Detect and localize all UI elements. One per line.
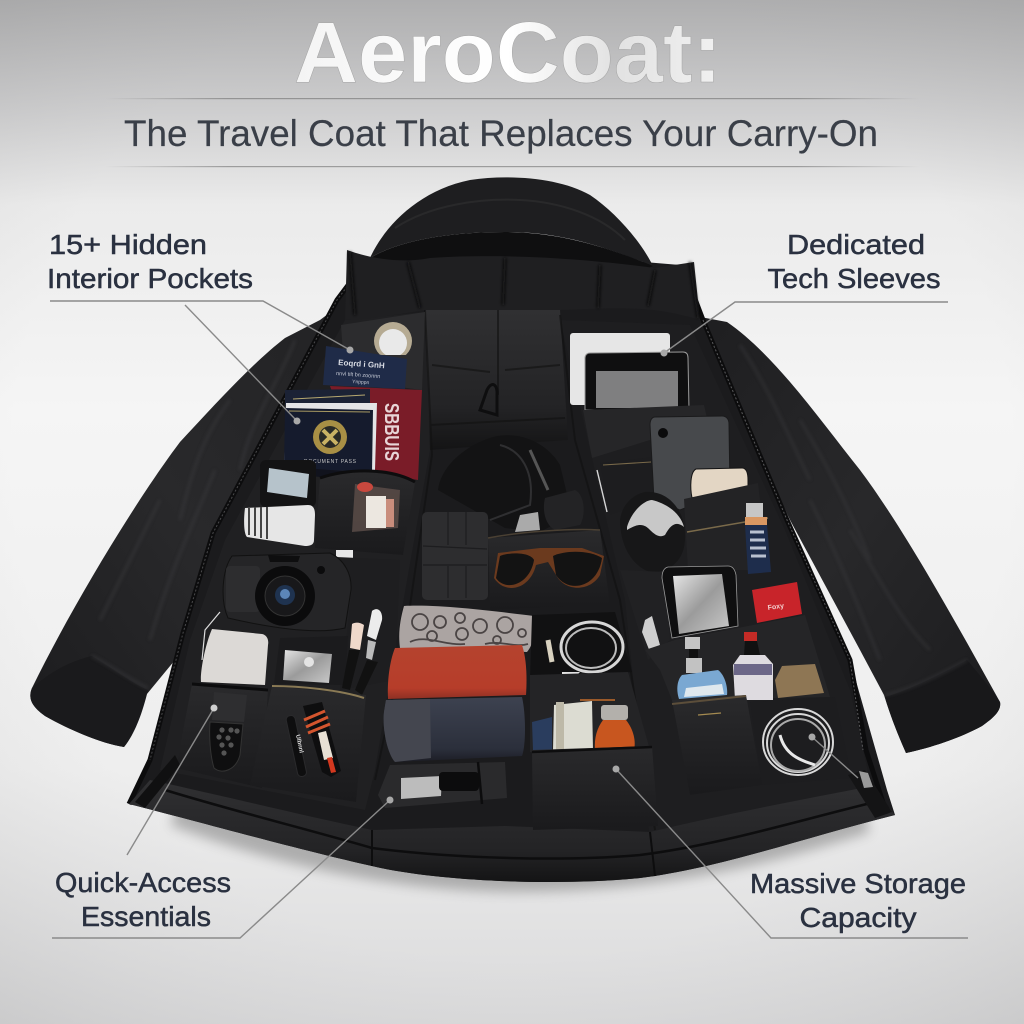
red box [752,582,802,623]
camera [223,553,351,631]
callout: Quick-Access Essentials: Quick-Access [55,867,231,898]
right zip pocket [684,483,768,570]
callout: Massive Storage Capacity [612,734,968,938]
tan package [775,664,824,698]
pouch with clear pocket [315,471,415,555]
coat body and lining [129,250,895,882]
maroon passport: SBBUIS [380,403,402,461]
navy card [323,346,407,389]
cable clip under pouch [336,550,353,558]
large storage pocket [532,746,658,830]
sunscreen tube [745,503,771,574]
navy passports [284,389,377,480]
white bottle [733,632,773,700]
grey phone [650,416,730,510]
left sleeve cuff [30,656,148,747]
red box: Foxy [767,603,785,612]
callout: 15+ Hidden Interior Pockets: 15+ Hidden [49,229,207,260]
navy card: Ynpppn [352,379,370,386]
right sleeve cuff [885,660,1000,753]
pocket with toiletries [530,672,650,752]
power bank [201,629,268,685]
pocket with USB tools [250,686,366,802]
upper right pocket [583,405,712,458]
white adapter [244,505,315,546]
red roll [388,645,527,699]
right sleeve [695,316,1000,753]
callout: Massive Storage Capacity: Capacity [800,902,916,933]
blue spray bottle [677,637,727,699]
small charging cable [642,616,660,652]
lining right panel [560,320,872,840]
main zip pull [848,770,892,818]
divider above subtitle [105,98,920,99]
phone with silver screen [662,566,738,638]
pocket with USB tools: Ulbnnl [294,734,304,754]
quilted centre panel [425,310,568,450]
coat shadow [170,800,870,892]
mid right lining pocket [620,570,670,660]
title: AeroCoat: [294,5,722,101]
tablet [585,352,689,410]
callout: Dedicated Tech Sleeves: Tech Sleeves [768,263,940,294]
callout: Quick-Access Essentials [52,704,394,938]
patterned scarf roll [399,606,535,652]
cable compartment [530,612,632,680]
hood [370,177,653,266]
mirror pocket [274,636,348,685]
left sleeve [30,296,352,747]
navy roll [384,697,525,762]
carabiner strap near zip [135,755,180,808]
hood inner [370,232,653,272]
callout: 15+ Hidden Interior Pockets: Interior Pockets [47,263,253,294]
subtitle: The Travel Coat That Replaces Your Carry-On [124,113,878,154]
navy card: nnvl tilt bn zoonnn [336,371,381,380]
zip toiletry pocket [672,695,762,795]
small zip pocket with pen [597,457,655,515]
navy passports: DOCUMENT PASS [304,459,357,465]
right sleeve folds [740,345,967,695]
remote [210,722,243,771]
left top patch with badge [341,312,425,390]
callout: Massive Storage Capacity: Massive Storage [750,868,966,899]
bottom centre pouch [378,762,507,808]
callout: Dedicated Tech Sleeves [660,229,948,356]
device with light screen [260,460,316,507]
emblem [313,420,347,454]
divider below subtitle [105,166,920,167]
hanging black bag [438,385,584,532]
cable pocket [750,697,852,785]
white sheet [570,333,670,405]
callout: Quick-Access Essentials: Essentials [81,901,211,932]
zip right [682,265,887,815]
pens [342,609,382,695]
coat [30,177,1000,882]
beige power bank [691,468,748,498]
callout: Dedicated Tech Sleeves: Dedicated [787,229,925,260]
lining left panel [160,312,430,810]
cable loop near zip [202,612,220,660]
earbuds pouch [620,492,685,572]
maroon passport [330,386,422,480]
navy card: Eoqɾd i GnH [338,358,385,370]
sunglasses pocket [488,529,610,610]
pocket with remote [176,684,268,788]
left mid lining pocket [315,556,400,690]
left sleeve folds [92,340,295,688]
collar [345,250,700,320]
hem [129,780,895,882]
callout: 15+ Hidden Interior Pockets [47,229,354,424]
coiled cable [763,709,833,775]
hood seam [395,200,625,240]
wallet [422,512,488,600]
zip left [129,280,352,804]
right toiletry pocket back [645,615,830,700]
